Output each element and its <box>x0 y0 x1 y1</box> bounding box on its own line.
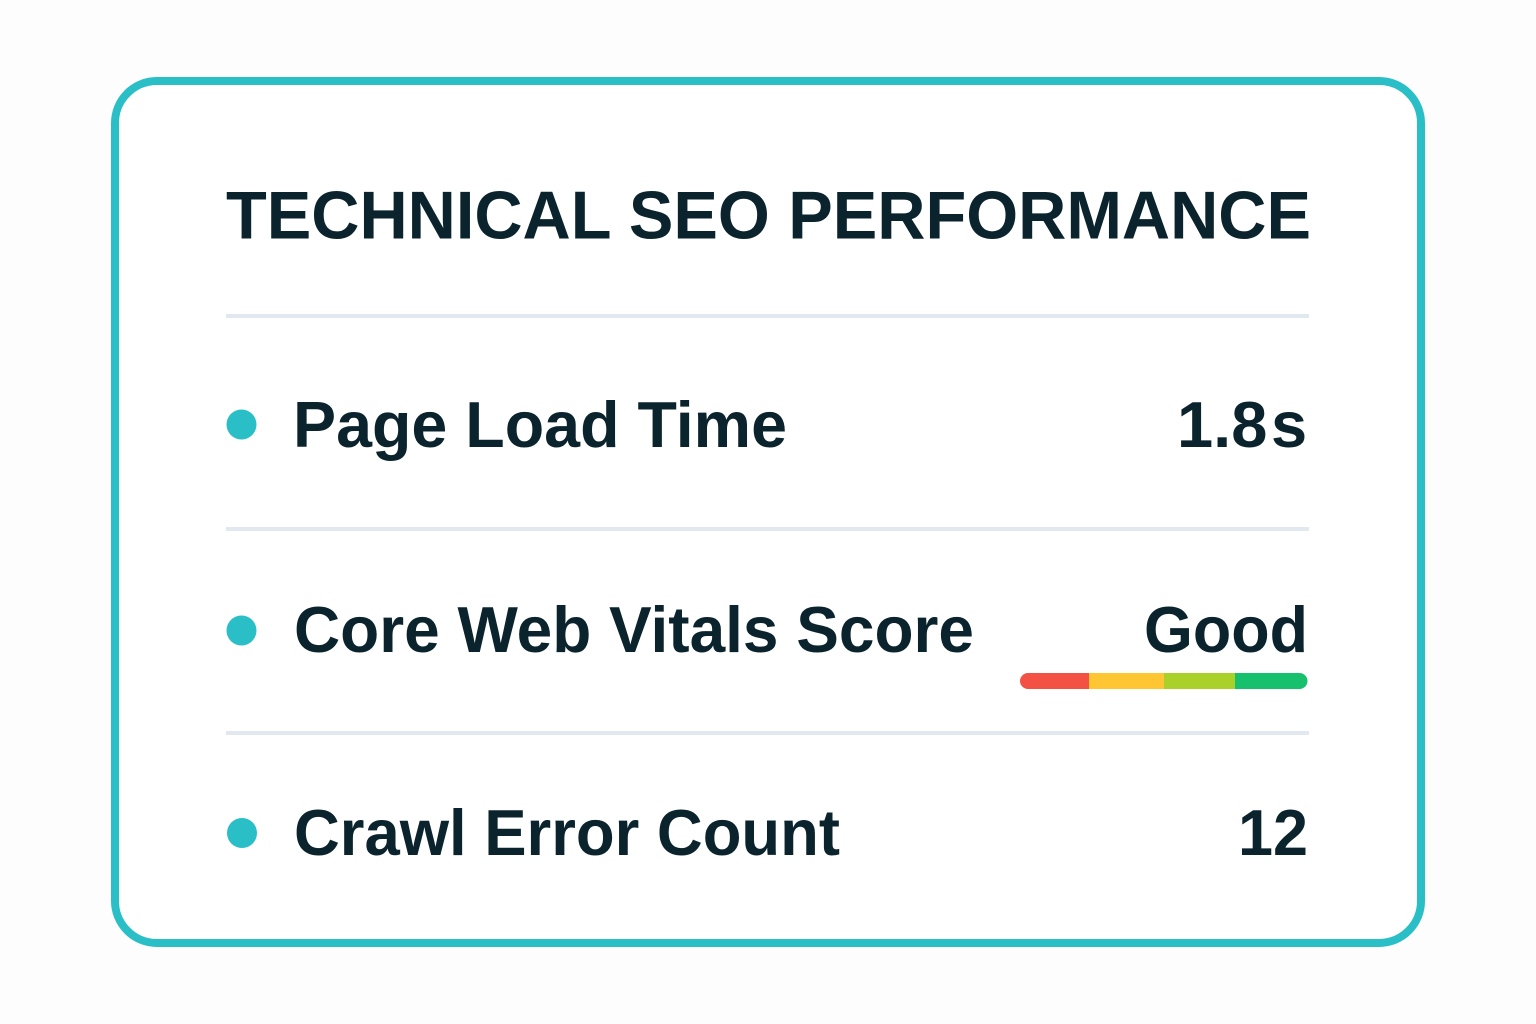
title: TECHNICAL SEO PERFORMANCE <box>226 178 1311 254</box>
label: crawl error count: Crawl Error Count <box>294 796 840 869</box>
value: page load time: 1.8 <box>1177 388 1267 461</box>
value: core web vitals score: Good <box>1144 593 1308 666</box>
icon: bullet dot <box>226 410 256 440</box>
icon: bullet dot <box>226 616 256 646</box>
row: core web vitals score <box>226 593 1308 689</box>
icon: bullet dot <box>227 818 257 848</box>
label: core web vitals score: Core Web Vitals Score <box>294 593 974 666</box>
gauge: score colour bar <box>1020 673 1308 689</box>
label: page load time: Page Load Time <box>293 388 787 461</box>
row: page load time <box>226 388 1307 461</box>
value: page load time: s <box>1271 388 1307 461</box>
panel: technical SEO performance card <box>115 81 1421 943</box>
value: crawl error count: 12 <box>1238 796 1308 869</box>
row: crawl error count <box>227 796 1308 869</box>
